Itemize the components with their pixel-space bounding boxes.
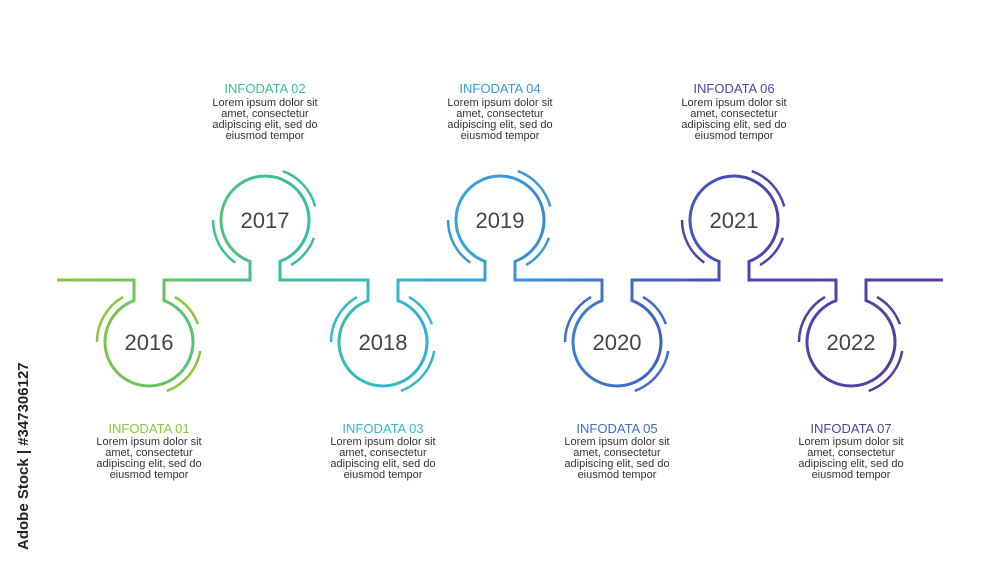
text block: infodata 05: INFODATA 05 — [576, 421, 658, 436]
timeline path — [57, 176, 943, 386]
text block: infodata 04: INFODATA 04 — [459, 81, 541, 96]
text block: infodata 05 — [564, 421, 670, 481]
text block: infodata 01: INFODATA 01 — [108, 421, 190, 436]
text block: infodata 03: INFODATA 03 — [342, 421, 424, 436]
year labels: 2020 — [593, 330, 641, 355]
text block: infodata 06: INFODATA 06 — [693, 81, 775, 96]
year labels: 2018 — [359, 330, 407, 355]
text block: infodata 02: adipiscing elit, sed do — [212, 119, 318, 131]
text block: infodata 06 — [681, 81, 787, 142]
text block: infodata 02: eiusmod tempor — [226, 130, 305, 142]
text block: infodata 06: eiusmod tempor — [695, 130, 774, 142]
text block: infodata 01: Lorem ipsum dolor sit — [96, 436, 202, 448]
text block: infodata 04: amet, consectetur — [456, 108, 544, 120]
year labels: 2021 — [710, 208, 758, 233]
text block: infodata 01: adipiscing elit, sed do — [96, 458, 202, 470]
text block: infodata 01: eiusmod tempor — [110, 469, 189, 481]
text block: infodata 06: Lorem ipsum dolor sit — [681, 97, 787, 109]
text block: infodata 03: Lorem ipsum dolor sit — [330, 436, 436, 448]
text block: infodata 01 — [96, 421, 202, 481]
text block: infodata 06: amet, consectetur — [690, 108, 778, 120]
text block: infodata 02 — [212, 81, 318, 142]
text block: infodata 07: eiusmod tempor — [812, 469, 891, 481]
year labels: 2016 — [125, 330, 173, 355]
text block: infodata 05: amet, consectetur — [573, 447, 661, 459]
text block: infodata 07: amet, consectetur — [807, 447, 895, 459]
text block: infodata 04: eiusmod tempor — [461, 130, 540, 142]
text block: infodata 06: adipiscing elit, sed do — [681, 119, 787, 131]
text block: infodata 05: eiusmod tempor — [578, 469, 657, 481]
year labels: 2022 — [827, 330, 875, 355]
text block: infodata 04 — [447, 81, 553, 142]
text block: infodata 02: Lorem ipsum dolor sit — [212, 97, 318, 109]
year labels — [125, 208, 875, 355]
year labels: 2019 — [476, 208, 524, 233]
text block: infodata 05: adipiscing elit, sed do — [564, 458, 670, 470]
year labels: 2017 — [241, 208, 289, 233]
text block: infodata 07 — [798, 421, 904, 481]
text block: infodata 04: adipiscing elit, sed do — [447, 119, 553, 131]
text block: infodata 07: INFODATA 07 — [810, 421, 892, 436]
text block: infodata 03 — [330, 421, 436, 481]
text block: infodata 03: adipiscing elit, sed do — [330, 458, 436, 470]
text block: infodata 03: eiusmod tempor — [344, 469, 423, 481]
text block: infodata 03: amet, consectetur — [339, 447, 427, 459]
watermark side text: Adobe Stock | #347306127 — [15, 362, 32, 550]
text block: infodata 07: adipiscing elit, sed do — [798, 458, 904, 470]
text block: infodata 01: amet, consectetur — [105, 447, 193, 459]
text block: infodata 02: INFODATA 02 — [224, 81, 306, 96]
decorative arcs — [97, 171, 902, 391]
text block: infodata 02: amet, consectetur — [221, 108, 309, 120]
text block: infodata 05: Lorem ipsum dolor sit — [564, 436, 670, 448]
text block: infodata 07: Lorem ipsum dolor sit — [798, 436, 904, 448]
text block: infodata 04: Lorem ipsum dolor sit — [447, 97, 553, 109]
